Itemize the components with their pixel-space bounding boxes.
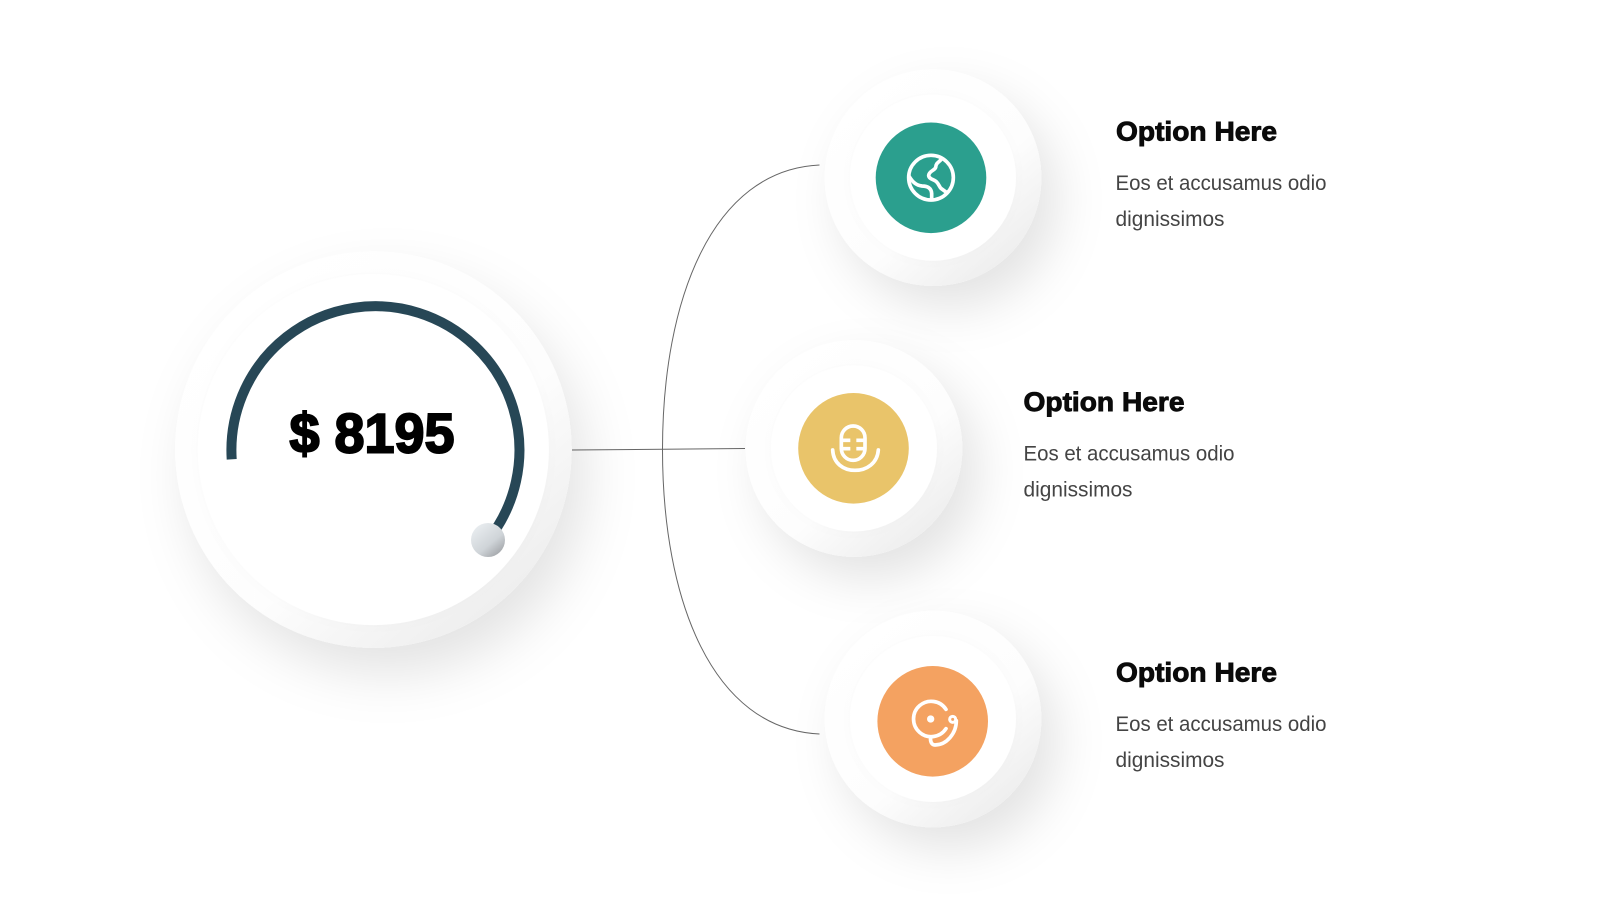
inner disc — [850, 95, 1016, 261]
main outer ring — [175, 251, 572, 648]
description: dignissimos — [1116, 749, 1224, 772]
description: dignissimos — [1024, 478, 1132, 502]
teal circle — [876, 122, 986, 233]
orange circle — [877, 666, 988, 777]
text: option 3 — [1116, 658, 1326, 772]
inner disc — [850, 636, 1016, 802]
description: dignissimos — [1116, 208, 1224, 231]
heading: Option Here — [1116, 116, 1277, 146]
heading: Option Here — [1116, 658, 1277, 688]
gauge knob — [471, 523, 505, 557]
icon: microphone — [833, 426, 878, 470]
main inner disc — [198, 274, 549, 625]
heading: Option Here — [1024, 387, 1184, 417]
panel: option 1 disc — [825, 69, 1041, 286]
icon: headset — [914, 701, 956, 745]
outer ring — [825, 611, 1041, 827]
description: Eos et accusamus odio — [1116, 713, 1326, 736]
description: Eos et accusamus odio — [1024, 442, 1234, 466]
panel: option 2 disc — [746, 340, 962, 557]
gauge arc — [231, 306, 519, 540]
outer ring — [746, 340, 962, 557]
outer ring — [825, 69, 1041, 286]
connector: horizontal line from main circle — [572, 448, 745, 450]
icon: globe — [909, 155, 953, 200]
value: $ 8195 — [290, 402, 454, 464]
connector: curved bracket to options — [662, 165, 820, 734]
description: Eos et accusamus odio — [1116, 172, 1326, 195]
text: option 1 — [1116, 116, 1326, 231]
text: option 2 — [1024, 387, 1234, 502]
inner disc — [771, 366, 937, 532]
panel: option 3 disc — [825, 611, 1041, 827]
yellow circle — [798, 393, 909, 504]
panel: main gauge — [175, 251, 572, 648]
